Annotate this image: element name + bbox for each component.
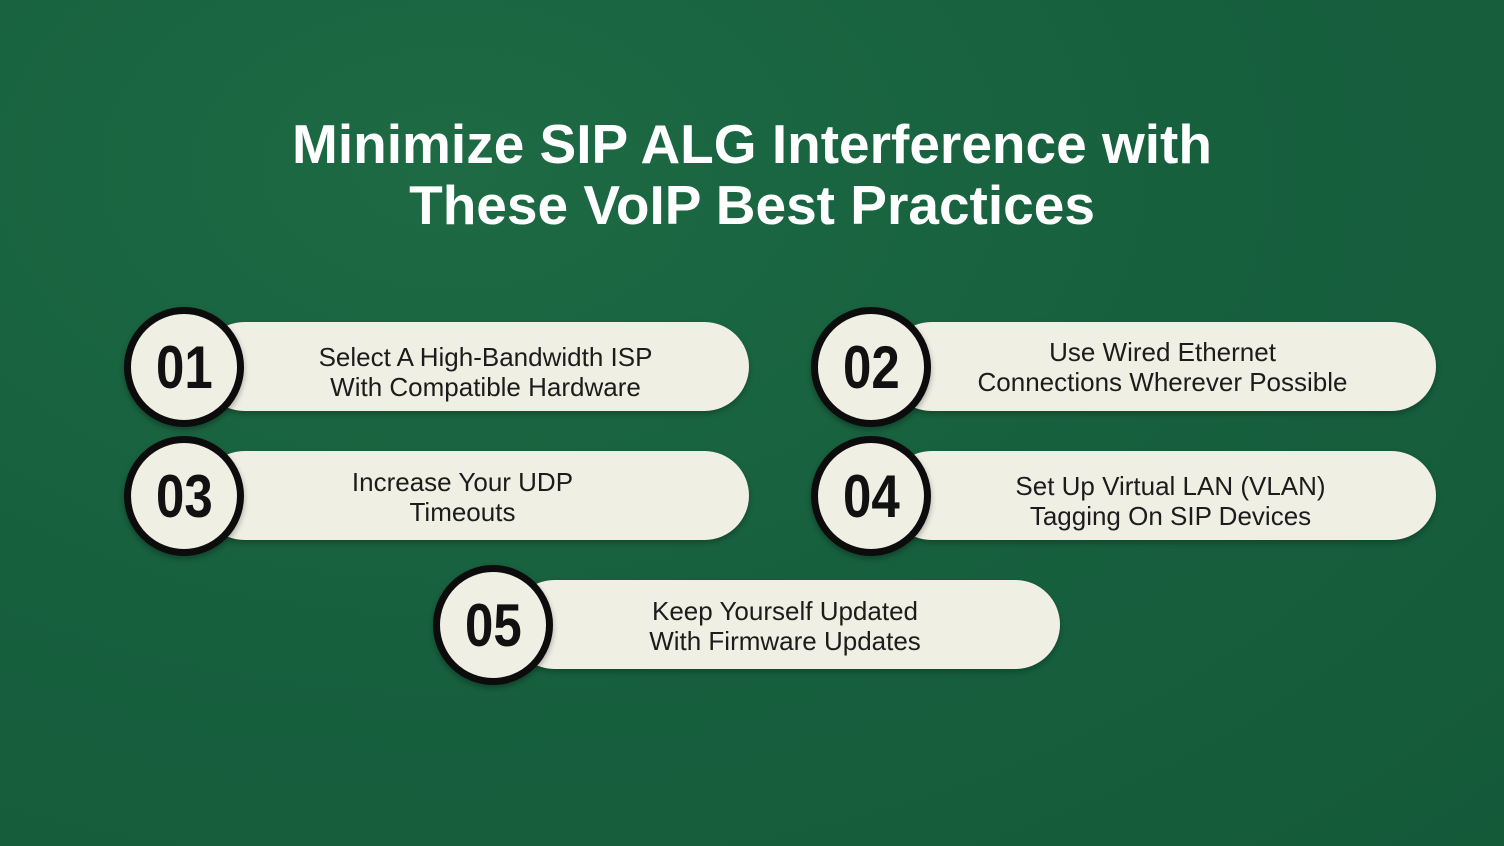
pill 02 [887, 322, 1436, 411]
circle 03: 03 [156, 462, 212, 530]
pill 05 [510, 580, 1060, 669]
pill 04: Tagging On SIP Devices [1030, 500, 1311, 530]
pill 05: With Firmware Updates [649, 626, 921, 656]
pill 01: With Compatible Hardware [330, 372, 641, 402]
circle 04: 04 [843, 462, 899, 530]
pill 02: Connections Wherever Possible [978, 366, 1347, 396]
pill 02: Use Wired Ethernet [1049, 336, 1276, 366]
circle 02: 02 [843, 334, 899, 400]
circle 04 [811, 436, 931, 556]
title [292, 113, 1212, 236]
circle 02 [811, 307, 931, 427]
pill 04 [887, 451, 1436, 540]
circle 01 [124, 307, 244, 427]
pill 04: Set Up Virtual LAN (VLAN) [1015, 470, 1326, 500]
pill 01: Select A High-Bandwidth ISP [319, 342, 652, 372]
pill 01 [200, 322, 749, 411]
pill 03 [200, 451, 749, 540]
title: These VoIP Best Practices [409, 174, 1095, 236]
circle 05: 05 [465, 592, 521, 658]
pill 03: Timeouts [410, 496, 515, 526]
circle 01: 01 [156, 334, 212, 400]
pill 05: Keep Yourself Updated [652, 596, 918, 626]
circle 05 [433, 565, 553, 685]
circle 03 [124, 436, 244, 556]
title: Minimize SIP ALG Interference with [292, 113, 1212, 175]
pill 03: Increase Your UDP [352, 466, 573, 496]
